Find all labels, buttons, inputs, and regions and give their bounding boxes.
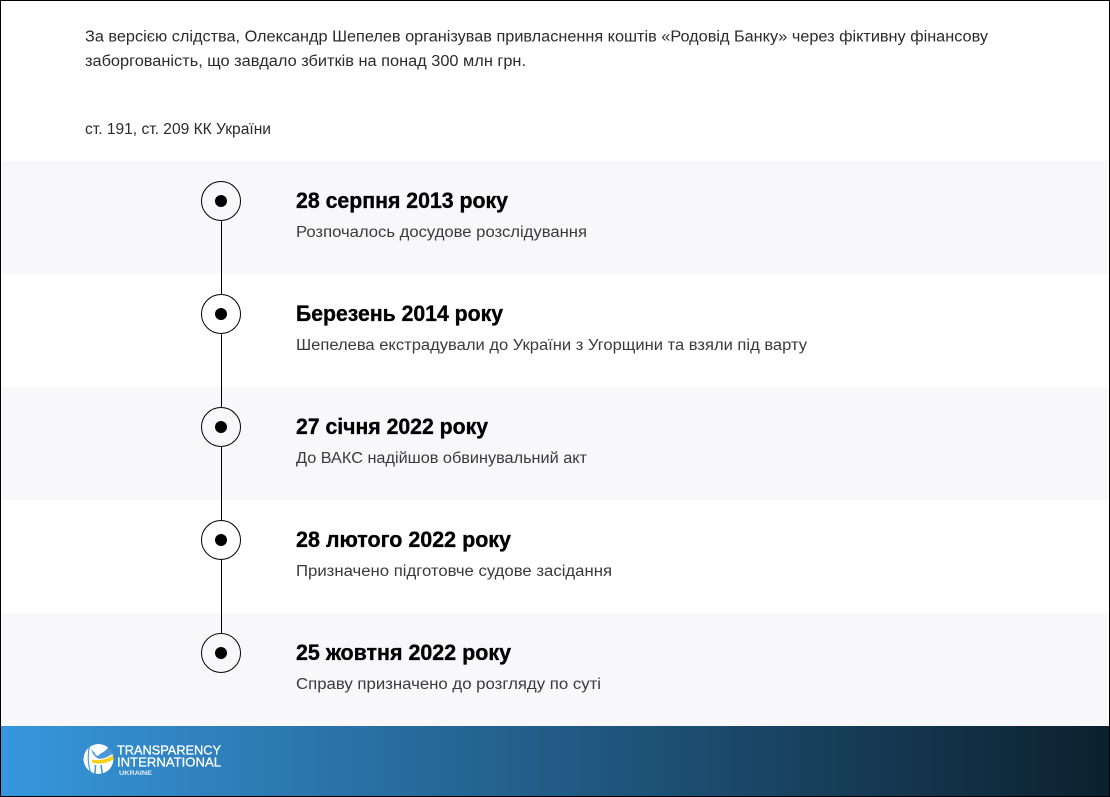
- intro text: За версією слідства, Олександр Шепелев організував привласнення коштів «Родовід Банку» через фіктивну фінансову: [85, 28, 988, 46]
- event 5: [202, 634, 601, 693]
- logo: Transparency International Ukraine: [84, 744, 222, 777]
- logo wordmark: TRANSPARENCY: [117, 744, 222, 758]
- event 3 description: До ВАКС надійшов обвинувальний акт: [296, 450, 587, 467]
- event 2 description: Шепелева екстрадували до України з Угорщини та взяли під варту: [296, 337, 807, 354]
- logo wordmark: [117, 744, 222, 777]
- intro text: заборгованість, що завдало збитків на понад 300 млн грн.: [85, 53, 526, 70]
- marker 4: [202, 520, 240, 560]
- intro text: [85, 28, 988, 70]
- marker 2: [202, 294, 240, 334]
- timeline row 1 background: [0, 161, 1110, 274]
- timeline row 3 background: [0, 387, 1110, 500]
- event 4 description: Призначено підготовче судове засідання: [296, 563, 612, 580]
- timeline row 5 background: [0, 613, 1110, 726]
- event 3 date: 27 січня 2022 року: [296, 414, 489, 439]
- event 5 date: 25 жовтня 2022 року: [296, 640, 512, 665]
- event 1 date: 28 серпня 2013 року: [296, 188, 509, 213]
- event 2: [202, 294, 807, 354]
- marker 1: [202, 182, 240, 220]
- marker 3: [202, 408, 240, 446]
- event 1 description: Розпочалось досудове розслідування: [296, 224, 587, 241]
- logo wordmark: INTERNATIONAL: [117, 756, 221, 770]
- logo wordmark: UKRAINE: [119, 771, 152, 777]
- event 1: [202, 182, 587, 241]
- marker 5: [202, 634, 240, 672]
- event 4 date: 28 лютого 2022 року: [296, 527, 512, 552]
- event 4: [202, 520, 612, 580]
- event 2 date: Березень 2014 року: [296, 301, 504, 326]
- event 5 description: Справу призначено до розгляду по суті: [296, 676, 601, 693]
- event 3: [202, 408, 587, 467]
- footer bar: [0, 726, 1110, 797]
- timeline connector line: [220, 201, 222, 653]
- legal articles: ст. 191, ст. 209 КК України: [85, 121, 271, 138]
- icon: globe with figure: [84, 744, 115, 775]
